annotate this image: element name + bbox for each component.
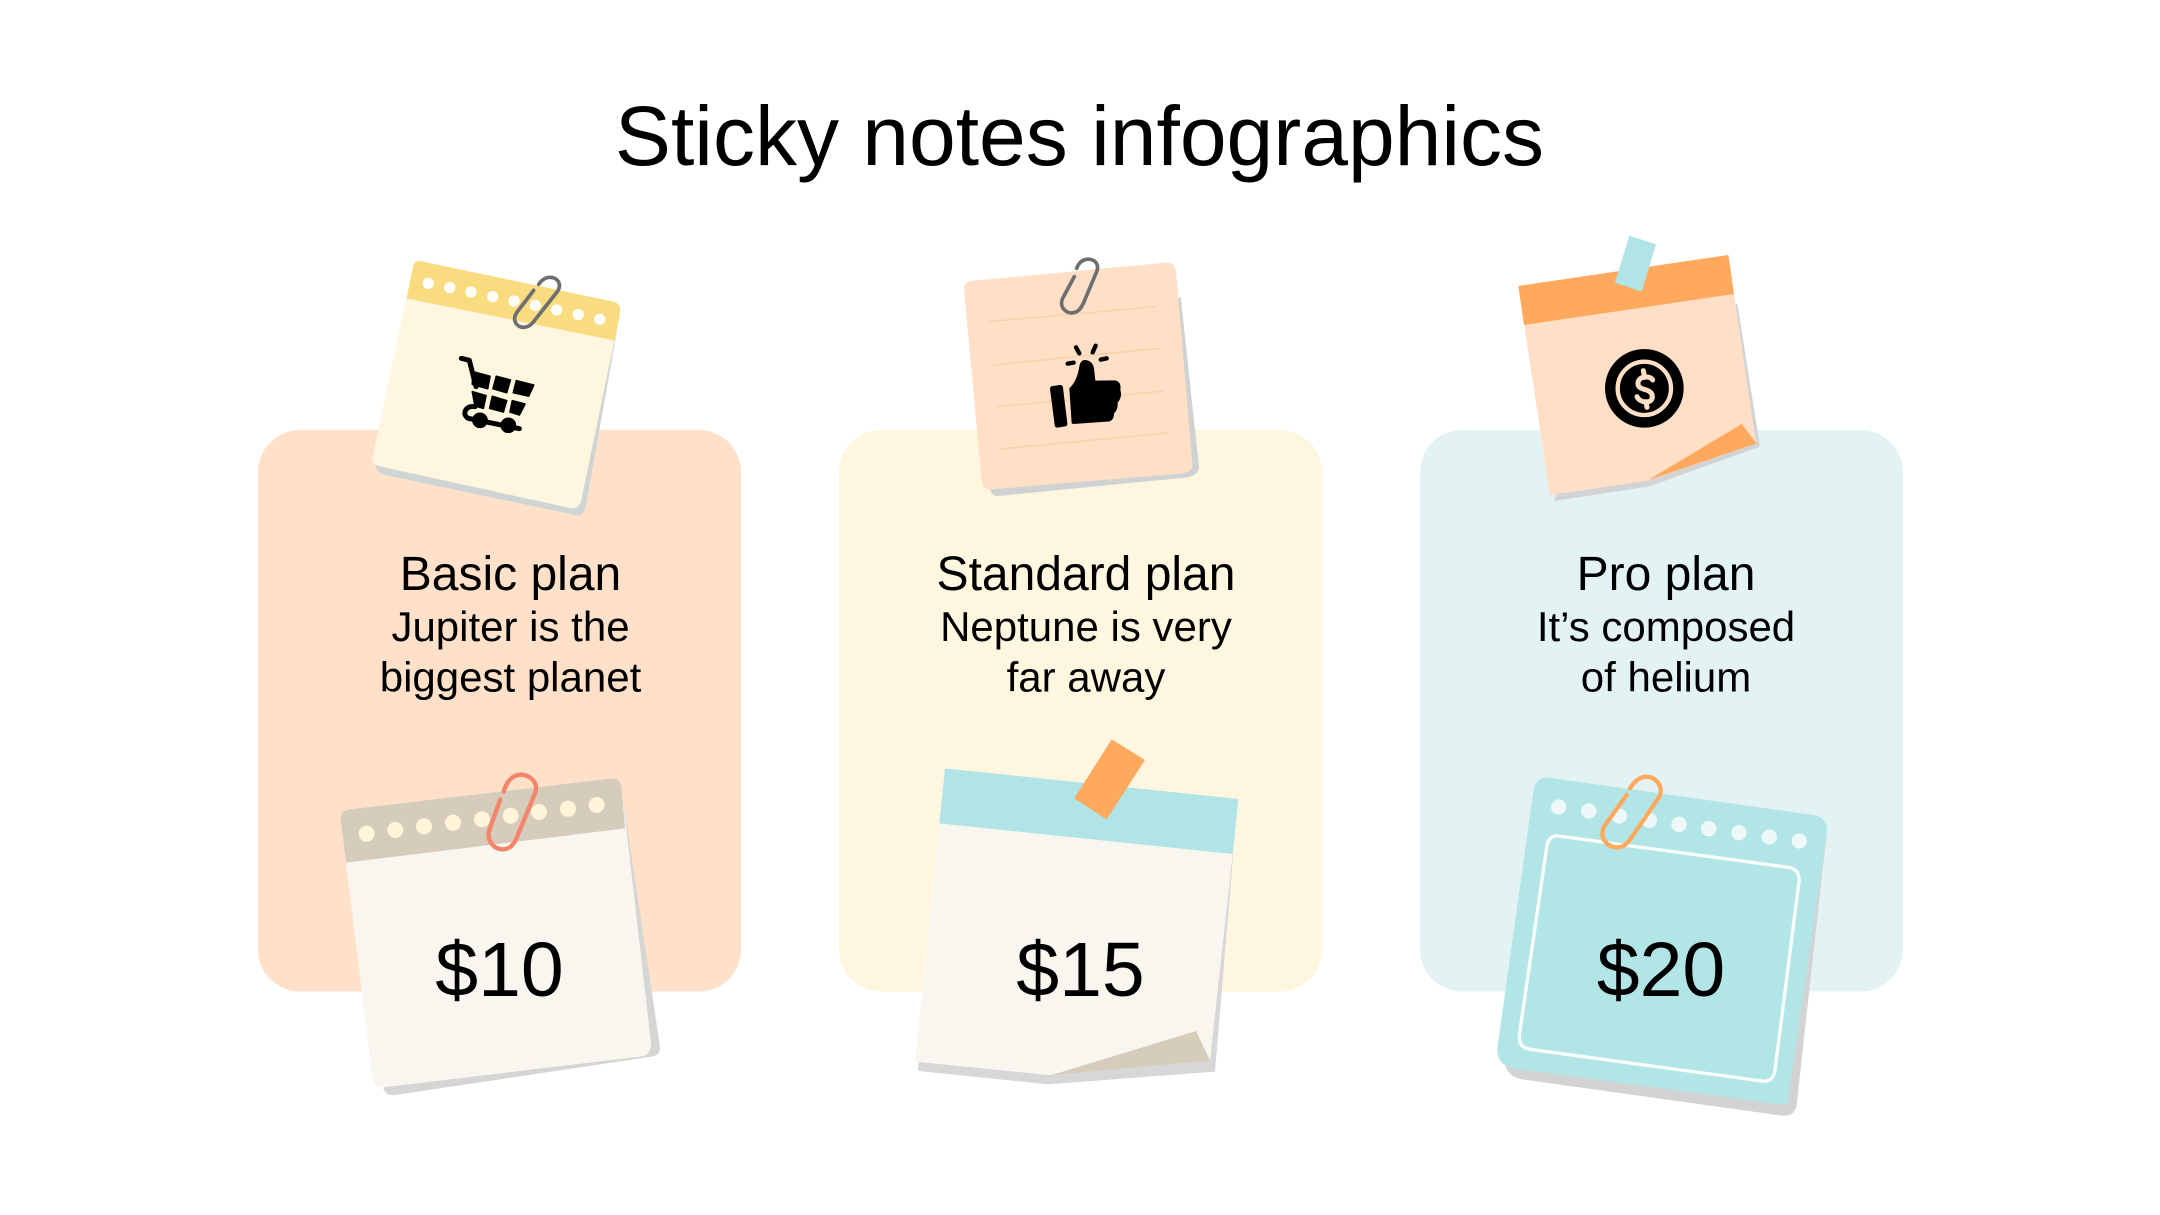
sticky note: teal with white border, price $20 — [1497, 777, 1827, 1116]
icon: thumbs up — [1050, 346, 1121, 428]
icon: teal tape — [1615, 236, 1656, 292]
sticky note: peach with orange band and dollar icon — [1518, 236, 1760, 501]
icon: orange tape — [1074, 739, 1145, 819]
text block: standard plan: Neptune is very — [940, 603, 1232, 650]
text block: pro plan: It’s composed — [1537, 603, 1795, 650]
icon: paperclip grey — [1062, 259, 1098, 313]
text block: standard plan: Standard plan — [937, 548, 1235, 601]
icon: paperclip grey — [515, 277, 559, 327]
text block: pro plan: Pro plan — [1577, 548, 1755, 601]
sticky note: yellow with cart icon — [373, 261, 620, 515]
icon: shopping cart — [461, 358, 534, 432]
text block: basic plan — [380, 548, 642, 700]
sticky note: cream with teal band, price $15 — [915, 739, 1238, 1084]
title: Sticky notes infographics — [615, 89, 1544, 183]
text block: pro plan: of helium — [1581, 654, 1751, 700]
price: $10: $10 — [435, 927, 564, 1013]
text block: basic plan: Basic plan — [400, 548, 621, 601]
text block: basic plan: Jupiter is the — [391, 603, 630, 650]
price: $20: $20 — [1597, 927, 1725, 1013]
text block: basic plan: biggest planet — [380, 654, 642, 700]
icon: paperclip coral — [489, 775, 536, 849]
sticky note: peach lined with thumbs up icon — [964, 259, 1199, 496]
panel: pro plan — [1420, 430, 1903, 992]
panel: basic plan — [258, 430, 741, 992]
text block: pro plan — [1537, 548, 1795, 700]
sticky note: cream with taupe band, price $10 — [341, 775, 660, 1095]
price: $15: $15 — [1016, 927, 1145, 1013]
icon: dollar coin — [1605, 349, 1684, 428]
text block: standard plan: far away — [1007, 654, 1165, 700]
text block: standard plan — [937, 548, 1235, 700]
icon: paperclip orange — [1602, 777, 1661, 847]
panel: standard plan — [839, 430, 1322, 992]
